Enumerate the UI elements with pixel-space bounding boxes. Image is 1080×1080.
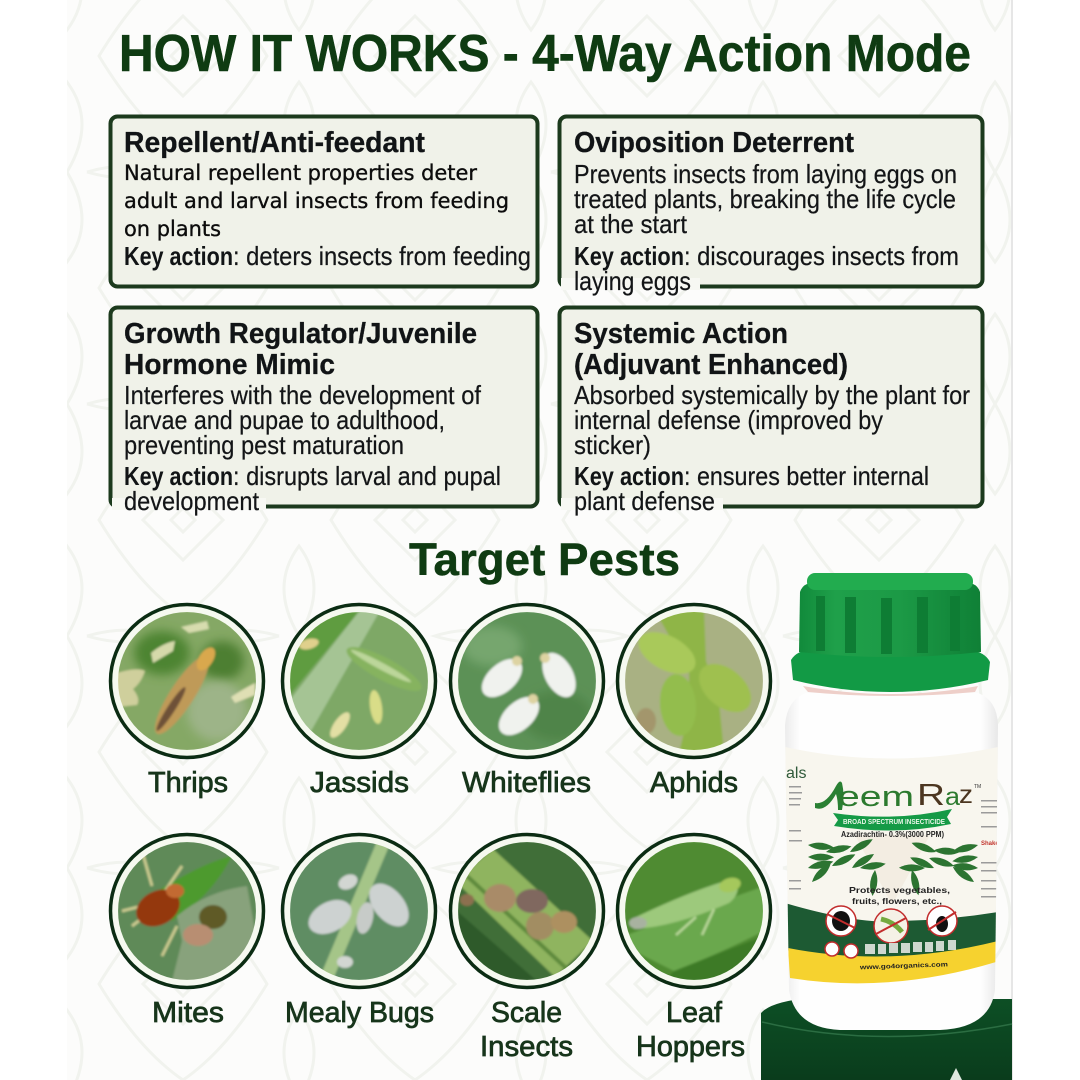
- key action: systemic action: : ensures better internal: [684, 461, 929, 491]
- heading: repellent: Repellent/Anti-feedant: [124, 127, 425, 159]
- description: systemic action: sticker): [574, 430, 651, 460]
- heading: target pests: Target Pests: [409, 534, 680, 585]
- logo: NeemRaz: eem: [838, 781, 914, 813]
- description: systemic action: Absorbed systemically by the plant for: [574, 380, 970, 410]
- description: oviposition: treated plants, breaking the life cycle: [574, 184, 956, 214]
- photo: mealy bugs: [289, 839, 429, 981]
- logo: NeemRaz: [815, 777, 981, 813]
- protects text: fruits, flowers, etc.,: [852, 896, 942, 906]
- heading: oviposition: Oviposition Deterrent: [574, 127, 854, 159]
- label: mites: Mites: [152, 997, 224, 1029]
- description: oviposition: [574, 159, 957, 239]
- description: growth regulator: Interferes with the development of: [124, 380, 482, 410]
- label: whiteflies: Whiteflies: [462, 767, 591, 799]
- key action: oviposition: : discourages insects from: [684, 241, 959, 271]
- active ingredient text: Azadirachtin- 0.3%(3000 PPM): [841, 830, 944, 839]
- website text: www.go4organics.com: [859, 961, 948, 971]
- description: repellent: adult and larval insects from feeding: [124, 189, 509, 213]
- protects text: Protects vegetables,: [849, 885, 950, 895]
- description: growth regulator: [124, 380, 482, 460]
- bottle label: [785, 747, 1012, 983]
- key action: oviposition: Key action: [574, 241, 684, 271]
- photo: whiteflies: [457, 611, 597, 751]
- cap flange and rim: [791, 650, 990, 692]
- description: growth regulator: preventing pest maturation: [124, 430, 404, 460]
- pest: jassids: [282, 604, 436, 758]
- label: jassids: Jassids: [310, 767, 409, 799]
- heading: growth regulator: Growth Regulator/Juvenile: [124, 318, 477, 350]
- label: scale insects: Insects: [480, 1031, 573, 1063]
- banner: broad spectrum insecticide: [833, 809, 952, 831]
- key action: growth regulator: [124, 461, 501, 516]
- key action: repellent: [124, 241, 531, 271]
- protects text: [849, 885, 950, 906]
- key action: repellent: Key action: [124, 241, 233, 271]
- panel: growth regulator: [110, 308, 538, 516]
- pedestal: [761, 999, 1012, 1080]
- key action: oviposition: [574, 241, 959, 296]
- heading: growth regulator: Hormone Mimic: [124, 349, 335, 381]
- logo: NeemRaz: R: [917, 777, 945, 812]
- label: thrips: Thrips: [148, 767, 228, 799]
- description: systemic action: internal defense (improved by: [574, 405, 883, 435]
- description: oviposition: Prevents insects from laying eggs on: [574, 159, 957, 189]
- panel: repellent / anti-feedant: [110, 116, 538, 286]
- logo: NeemRaz: a: [945, 783, 960, 811]
- label: scale insects: Scale: [491, 997, 562, 1029]
- icons: safety row: [825, 940, 956, 958]
- heading: systemic action: (Adjuvant Enhanced): [574, 349, 848, 381]
- photo: aphids: [624, 609, 764, 753]
- label: scale insects: [480, 997, 573, 1063]
- pest: mites: [110, 834, 264, 988]
- photo: thrips: [117, 611, 257, 751]
- label: mealy bugs: Mealy Bugs: [285, 997, 434, 1029]
- title: HOW IT WORKS - 4-Way Action Mode: [119, 25, 971, 83]
- photo: leaf hoppers: [624, 841, 764, 981]
- cap body: [799, 584, 981, 657]
- logo: NeemRaz: z: [959, 779, 973, 809]
- pest: thrips: [110, 604, 264, 758]
- pest: mealy bugs: [282, 834, 436, 988]
- neem leaves illustration: [807, 837, 979, 896]
- label: leaf hoppers: Hoppers: [636, 1031, 745, 1063]
- pest: scale insects: [450, 834, 604, 988]
- key action: repellent: : deters insects from feeding: [233, 241, 531, 271]
- logo: NeemRaz: TM: [974, 784, 981, 790]
- pest: whiteflies: [450, 604, 604, 758]
- key action: growth regulator: : disrupts larval and pupal: [233, 461, 501, 491]
- product bottle: [785, 573, 1012, 1030]
- bottle label: als: [786, 765, 806, 782]
- description: repellent: on plants: [124, 217, 221, 241]
- photo: mites: [117, 841, 257, 981]
- bottle label: Shake well: [981, 841, 1012, 847]
- photo: scale insects: [455, 841, 597, 981]
- description: systemic action: [574, 380, 970, 460]
- description: repellent: [124, 161, 509, 241]
- key action: systemic action: Key action: [574, 461, 684, 491]
- pest: leaf hoppers: [618, 834, 770, 988]
- description: repellent: Natural repellent properties deter: [124, 161, 477, 185]
- bottle body: [785, 693, 998, 1030]
- key action: growth regulator: Key action: [124, 461, 233, 491]
- label: leaf hoppers: [636, 997, 745, 1063]
- description: oviposition: at the start: [574, 209, 688, 239]
- heading: growth regulator: [124, 318, 477, 381]
- panel: systemic action: [560, 308, 982, 516]
- key action: oviposition: laying eggs: [574, 266, 691, 296]
- pest: aphids: [618, 604, 770, 758]
- panel: oviposition deterrent: [560, 116, 982, 296]
- description: growth regulator: larvae and pupae to adulthood,: [124, 405, 445, 435]
- key action: systemic action: [574, 461, 929, 516]
- heading: systemic action: Systemic Action: [574, 318, 788, 350]
- label: aphids: Aphids: [650, 767, 738, 799]
- key action: systemic action: plant defense: [574, 486, 715, 516]
- label: leaf hoppers: Leaf: [666, 997, 723, 1029]
- heading: systemic action: [574, 318, 848, 381]
- icons: no pests: [826, 906, 957, 943]
- banner: broad spectrum insecticide: BROAD SPECTRUM INSECTICIDE: [843, 819, 945, 826]
- photo: jassids: [289, 609, 429, 751]
- key action: growth regulator: development: [124, 486, 260, 516]
